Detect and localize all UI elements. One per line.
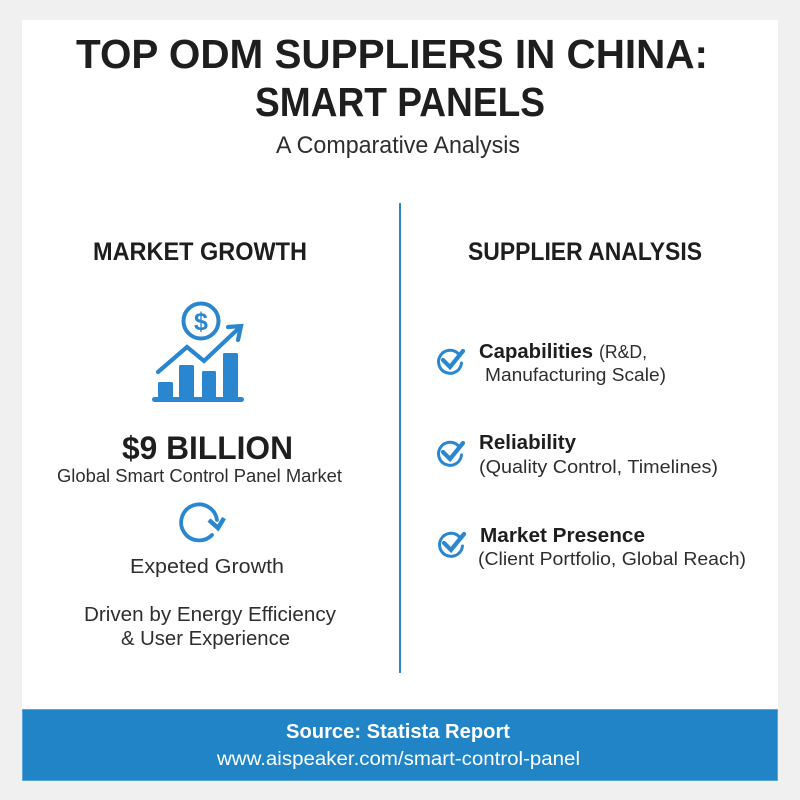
icon: check badge bbox=[439, 350, 463, 373]
subtitle: A Comparative Analysis bbox=[276, 132, 520, 159]
market size label: Global Smart Control Panel Market bbox=[57, 466, 342, 486]
column divider bbox=[399, 203, 401, 673]
panel: supplier analysis bbox=[439, 238, 746, 569]
title: SMART PANELS bbox=[255, 79, 545, 125]
capabilities text: Manufacturing Scale) bbox=[485, 364, 666, 385]
capabilities text: (R&D, bbox=[599, 342, 647, 362]
title bbox=[76, 31, 708, 125]
source line: Source: Statista Report bbox=[286, 721, 510, 743]
growth drivers text bbox=[84, 604, 336, 650]
market size figure: $9 BILLION bbox=[122, 430, 293, 466]
panel: market growth bbox=[57, 238, 342, 650]
icon: check badge bbox=[440, 533, 464, 556]
capabilities text bbox=[479, 340, 666, 385]
item: capabilities bbox=[439, 340, 666, 385]
heading: market growth: MARKET GROWTH bbox=[93, 238, 307, 266]
footer band bbox=[22, 710, 778, 780]
reliability text bbox=[479, 431, 718, 477]
market presence text bbox=[478, 524, 746, 569]
market presence text: (Client Portfolio, Global Reach) bbox=[478, 548, 746, 569]
icon: rising bar chart with dollar coin: $ bbox=[194, 308, 208, 336]
growth drivers text: & User Experience bbox=[121, 628, 290, 650]
market presence text: Market Presence bbox=[480, 524, 645, 547]
icon: rising bar chart with dollar coin bbox=[152, 304, 244, 402]
website url: www.aispeaker.com/smart-control-panel bbox=[216, 749, 580, 770]
item: reliability bbox=[439, 431, 718, 477]
title: TOP ODM SUPPLIERS IN CHINA: bbox=[76, 31, 708, 77]
icon: check badge bbox=[439, 442, 463, 465]
capabilities text: Capabilities bbox=[479, 340, 593, 363]
growth label: Expeted Growth bbox=[130, 556, 284, 578]
growth drivers text: Driven by Energy Efficiency bbox=[84, 604, 336, 626]
item: market presence bbox=[440, 524, 746, 569]
icon: circular growth arrow bbox=[181, 504, 224, 540]
heading: supplier analysis: SUPPLIER ANALYSIS bbox=[468, 238, 702, 266]
reliability text: Reliability bbox=[479, 431, 577, 454]
reliability text: (Quality Control, Timelines) bbox=[479, 456, 718, 477]
